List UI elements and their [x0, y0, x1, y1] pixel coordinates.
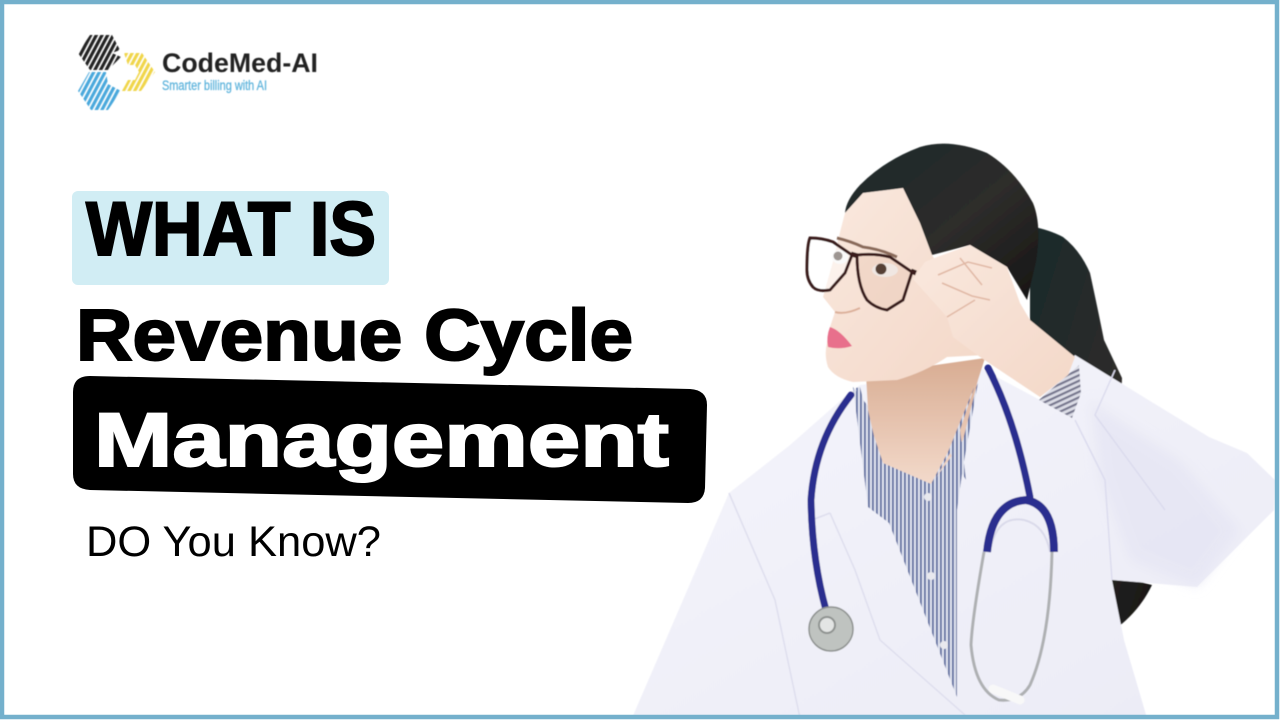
- highlight box: [72, 191, 389, 285]
- icon: yellow hexagon: [122, 53, 155, 91]
- ponytail: [1030, 226, 1152, 627]
- heading: Revenue Cycle: Revenue Cycle: [76, 296, 633, 376]
- banner text: Management: [94, 398, 669, 483]
- right iris: [876, 264, 886, 274]
- lips: [827, 327, 852, 348]
- eyebrow: [837, 238, 897, 257]
- neck: [866, 358, 985, 485]
- lab coat: [632, 355, 1275, 718]
- coat lapel lines: [729, 493, 965, 718]
- heading text: WHAT IS: [86, 187, 376, 272]
- sleeve shading: [1090, 400, 1240, 587]
- logo name: CodeMed-AI: [162, 48, 318, 78]
- black banner: [73, 376, 707, 503]
- metal tubes: [971, 552, 1052, 700]
- button 3: [940, 641, 948, 649]
- bridge and temple: [851, 254, 916, 273]
- shirt buttons: [924, 493, 948, 649]
- left iris: [834, 252, 842, 260]
- hair: [845, 144, 1038, 300]
- subheading: DO You Know?: DO You Know?: [86, 518, 381, 566]
- glasses: [807, 238, 916, 310]
- right eye: [872, 263, 898, 277]
- sleeve fold: [1075, 370, 1165, 580]
- illustration: doctor with glasses and stethoscope: [632, 144, 1275, 718]
- nose shading: [835, 308, 860, 313]
- shirt collar: [856, 385, 975, 487]
- left eye: [832, 250, 848, 264]
- stethoscope inner arch: [990, 519, 1050, 552]
- finger lines: [938, 258, 992, 317]
- chest piece centre: [819, 617, 835, 633]
- shirt cuff: [1039, 365, 1081, 418]
- collar flap: [868, 467, 931, 523]
- icon: blue hexagon: [78, 72, 121, 110]
- chest piece: [809, 607, 853, 651]
- logo tagline: Smarter billing with AI: [162, 78, 267, 93]
- left lens: [807, 238, 852, 291]
- ear tips: [993, 689, 1020, 700]
- hand and wrist: [913, 245, 1075, 397]
- heading highlight: WHAT IS: [72, 187, 389, 285]
- logo: CodeMed-AI: [78, 35, 318, 110]
- stethoscope tube: [811, 368, 1030, 610]
- face: [823, 188, 985, 382]
- button 2: [927, 572, 935, 580]
- icon: black hexagon: [78, 35, 121, 70]
- stethoscope headset: [987, 500, 1054, 552]
- right lens: [857, 254, 912, 310]
- heading banner: Management: [73, 376, 707, 503]
- button 1: [924, 493, 932, 501]
- shirt: [853, 383, 978, 697]
